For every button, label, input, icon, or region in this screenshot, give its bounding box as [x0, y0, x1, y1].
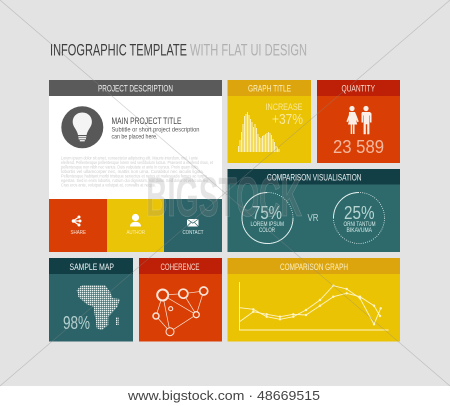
icon: envelope [187, 219, 198, 226]
panel: contact: CONTACT [182, 230, 204, 236]
heading: quantity: QUANTITY [342, 84, 375, 94]
panel: comparison visualisation [228, 169, 400, 252]
title: WITH FLAT UI DESIGN [190, 40, 307, 60]
histogram [238, 112, 279, 152]
donut: 75% [242, 192, 293, 244]
project title and subtitle [112, 116, 200, 140]
heading: comparison graph: COMPARISON GRAPH [280, 262, 348, 272]
panel: author: AUTHOR [126, 230, 145, 236]
watermark: BIGSTOCK: BIGSTOCK [146, 165, 302, 228]
donut: 25%: BIKAVUMA [346, 228, 372, 234]
donut: 25%: 25% [344, 203, 374, 223]
increase figure [266, 102, 303, 128]
panel: contact [164, 199, 222, 252]
increase figure: INCREASE [266, 102, 302, 113]
panel: share [49, 199, 107, 252]
panel: coherence [139, 258, 222, 342]
map: dotted Africa [76, 285, 120, 330]
heading: project description: PROJECT DESCRIPTION [98, 84, 173, 94]
icon: light bulb [61, 106, 103, 148]
icon: person [130, 214, 141, 226]
donut: 75%: 75% [252, 203, 282, 223]
panel: author [107, 199, 164, 252]
increase figure: +37% [272, 111, 303, 128]
body text [61, 156, 214, 188]
body text: egestas. Sed in enim lobortis, rutrum dui dignissim, nisl dolor. Sed dolor et vehicula leo [61, 178, 208, 183]
heading: coherence: COHERENCE [160, 262, 200, 272]
icon: female and male figures [346, 106, 372, 134]
network diagram [153, 287, 208, 336]
body text: eleifend. Pellentesque pellentesque lorem sed vestibulum luctus. Praesent a eleifend risus, et [61, 160, 214, 165]
map percentage: 98% [63, 313, 90, 333]
donut: 75%: LOREM IPSUM [250, 222, 284, 228]
donut: 25%: ORNI TANTUM [344, 222, 376, 228]
line chart [240, 282, 388, 330]
label: versus: VR [308, 212, 319, 224]
footer credit: www.bigstock.com · 48669515 [127, 389, 320, 403]
heading: sample map: SAMPLE MAP [70, 262, 114, 272]
panel: graph title [228, 80, 311, 163]
donut: 25% [334, 192, 384, 244]
panel: project description [49, 80, 222, 199]
quantity figure: 23 589 [333, 136, 384, 157]
body text: Cras eros ante, volutpat a volutpat at, convallis at neque. [61, 182, 156, 188]
panel: comparison graph [228, 258, 400, 342]
title: INFOGRAPHIC TEMPLATE [50, 40, 187, 60]
body text: Pellentesque habitant morbi tristique senectus et netus et malesuada fames ac turpis [61, 174, 208, 178]
donut: 75%: COLOR [259, 228, 275, 234]
panel: share: SHARE [70, 230, 86, 236]
project title and subtitle: can be placed here. [112, 134, 158, 140]
panel: sample map [49, 258, 133, 342]
project title and subtitle: Subtitle or short project description [112, 128, 200, 134]
heading: graph title: GRAPH TITLE [248, 84, 291, 94]
heading: comparison visualisation: COMPARISON VISUALISATION [267, 172, 362, 182]
icon: share [72, 216, 82, 226]
project title and subtitle: MAIN PROJECT TITLE [112, 116, 182, 126]
body text: pellentesque non nibh nec varius. Duis vulputate et ante in cursus. Proin quam felis, [61, 164, 199, 170]
body text: Lorem ipsum dolor sit amet, consectetur adipiscing elit. Mauris interdum, nisl, I ante [61, 156, 198, 160]
panel: quantity [317, 80, 400, 163]
body text: lobortis vel ullamcorper nec, mattis non urna. Curabitur nec iaculis ligula. [61, 169, 204, 174]
